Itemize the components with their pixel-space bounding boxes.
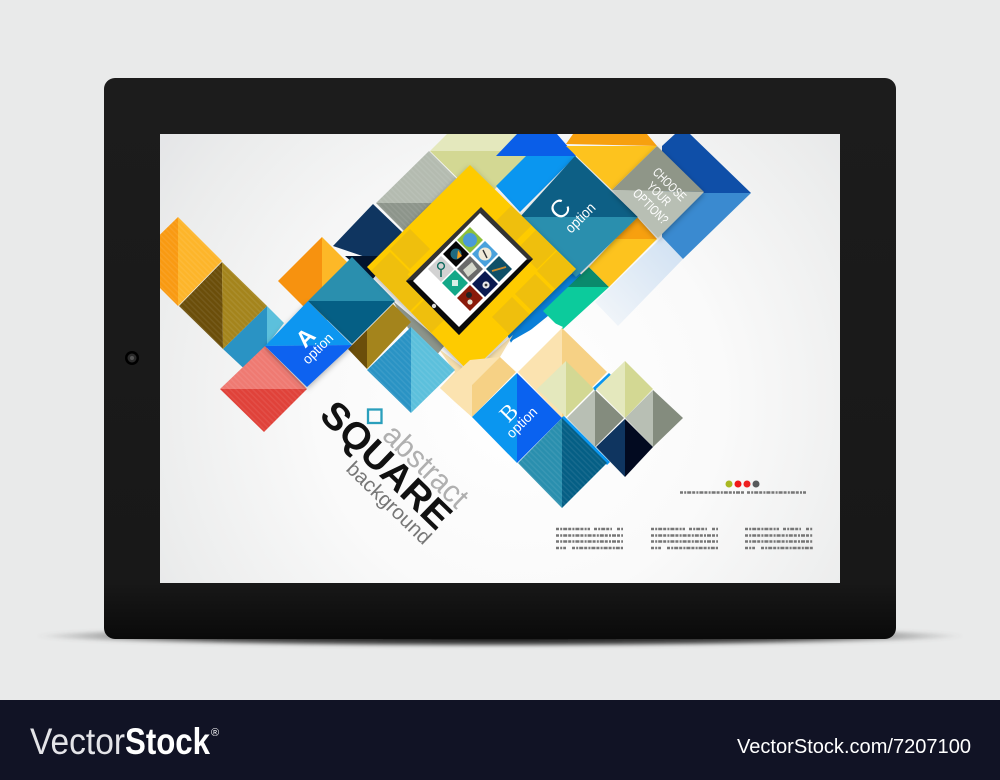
tablet device <box>104 78 896 639</box>
label B option: option <box>503 404 540 441</box>
tablet camera <box>125 351 139 365</box>
square: navy <box>596 419 653 477</box>
square: yellow orange top <box>566 134 657 190</box>
label C letter: C <box>544 193 577 226</box>
choose your option text: OPTION? <box>630 186 672 227</box>
tablet screen <box>160 134 840 583</box>
square: left blue <box>223 306 284 368</box>
headline square icon <box>368 410 382 423</box>
footer logo: Vector <box>30 721 125 762</box>
tablet ground shadow <box>36 625 964 647</box>
headline abstract: abstract <box>376 417 476 515</box>
square: green <box>543 267 609 330</box>
icon: compass <box>472 241 498 267</box>
icon: gear <box>457 285 483 311</box>
square: pale orange left <box>440 357 516 417</box>
square: dark navy <box>333 204 402 280</box>
icon: camera <box>472 271 498 297</box>
square: teal bottom <box>518 418 607 508</box>
placeholder column 3 <box>745 529 813 548</box>
mini tablet frame <box>406 207 533 335</box>
square: pale green 2 <box>596 361 653 418</box>
square: pale orange big <box>518 328 607 418</box>
square: gray 1 <box>567 390 624 447</box>
headline background: background <box>342 457 436 549</box>
label A letter: A <box>290 322 320 352</box>
icon: document <box>457 256 483 282</box>
label B letter: B <box>494 398 523 427</box>
footer logo: ® <box>211 727 219 739</box>
square: gray 2 <box>625 390 683 447</box>
headline square: SQUARE <box>312 393 460 538</box>
blue accent strips <box>561 373 611 465</box>
square: light blue <box>367 327 455 413</box>
square: blue far right <box>662 134 751 259</box>
choose your option text <box>634 168 687 224</box>
square: small orange <box>278 237 347 320</box>
square: right brown <box>348 304 411 369</box>
mini tablet screen <box>413 213 527 327</box>
label C option: option <box>563 200 599 237</box>
footer logo <box>30 721 219 762</box>
placeholder column 1 <box>556 529 623 548</box>
icon: photo <box>457 227 483 253</box>
icon: magnifier <box>428 256 454 282</box>
mini tablet frame shade <box>406 259 533 335</box>
square: pale green top <box>430 134 526 190</box>
placeholder column 2 <box>651 529 718 548</box>
square: blue A <box>265 301 352 387</box>
icon: dark chart <box>443 241 469 267</box>
label A option: option <box>299 330 336 367</box>
headline <box>312 393 476 549</box>
footer bar <box>0 700 1000 780</box>
square: blue B <box>472 373 562 463</box>
placeholder line under dots <box>680 491 806 494</box>
square: bright blue top <box>496 134 576 212</box>
square: bright blue strip <box>508 273 582 343</box>
stripe texture overlay <box>133 151 607 508</box>
footer url: VectorStock.com/7207100 <box>737 736 971 758</box>
mini tablet button <box>432 304 436 308</box>
icon: teal box <box>442 270 468 296</box>
square: teal C <box>520 156 638 277</box>
square: pale blue faded <box>595 237 683 326</box>
choose your option text: CHOOSE <box>650 165 690 204</box>
tablet bezel <box>104 78 896 639</box>
footer background <box>0 700 1000 780</box>
square: teal upper <box>308 257 395 344</box>
square: red <box>220 346 307 432</box>
square: gray choose your option <box>612 146 704 238</box>
choose your option text: YOUR <box>644 179 674 209</box>
square: gray hexagon <box>376 151 456 231</box>
square: gray strip <box>393 301 445 356</box>
square: left orange <box>160 217 222 306</box>
square: yellow centre <box>367 165 577 373</box>
square: pale green 1 <box>537 361 594 417</box>
mini tablet <box>406 207 533 335</box>
colour dots <box>726 480 760 488</box>
square: left brown <box>179 262 267 349</box>
footer logo: Stock <box>125 721 210 762</box>
square: pale back orange <box>438 335 513 417</box>
icon: pencil <box>486 256 512 282</box>
square: white accent <box>500 320 563 372</box>
square mosaic artwork <box>160 134 751 508</box>
faded icon tiles <box>370 202 577 337</box>
square: orange under C <box>589 217 657 287</box>
